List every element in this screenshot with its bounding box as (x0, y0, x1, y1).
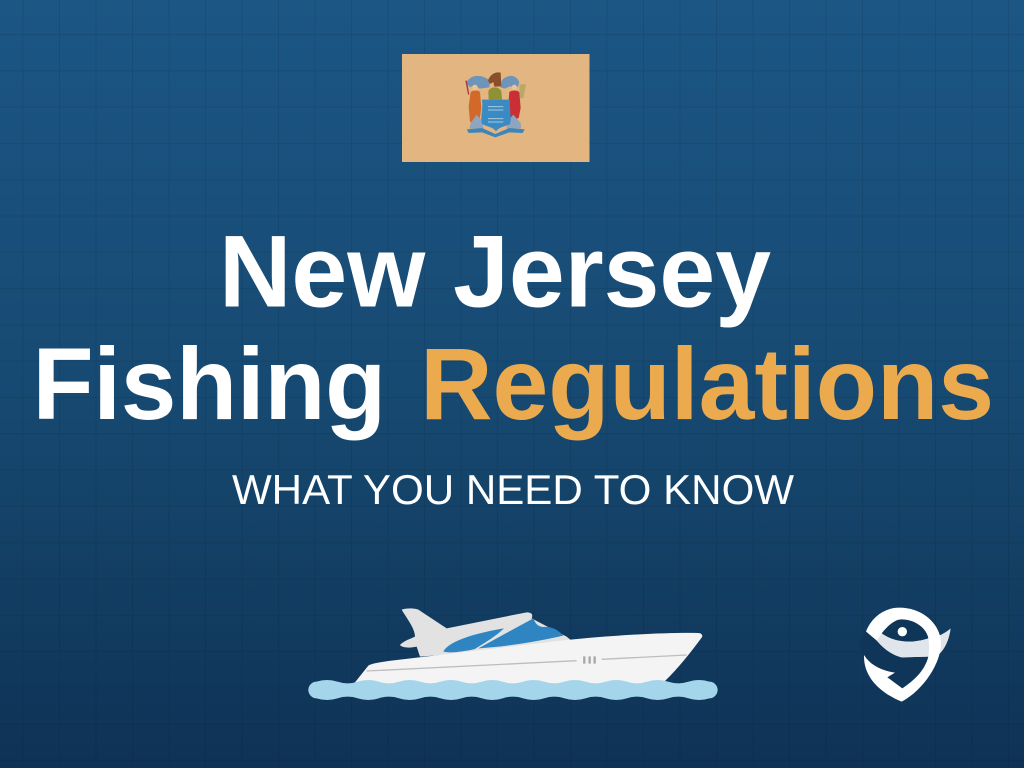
title line 2: Fishing: Fishing (32, 328, 386, 441)
seal ribbon (467, 128, 525, 137)
boat vents (584, 656, 595, 664)
logo eye lens (882, 619, 928, 642)
seal horse head (488, 72, 501, 87)
boat hull (355, 633, 702, 688)
logo tail (928, 628, 951, 657)
logo body (864, 608, 941, 702)
boat cabin and fin (400, 608, 577, 657)
seal shield (481, 100, 511, 131)
boat windows (443, 628, 504, 652)
seal cornucopia (519, 84, 526, 99)
logo inner lower dark (858, 632, 928, 688)
title line 2: Regulations: Regulations (420, 327, 994, 441)
flag seal (465, 72, 526, 137)
New Jersey state flag (402, 54, 590, 162)
logo band (877, 633, 929, 657)
logo eye (898, 627, 907, 636)
seal staff and cap (465, 81, 469, 95)
seal helmet (488, 87, 502, 100)
seal left figure (469, 90, 481, 122)
title line 1: New Jersey (219, 215, 771, 329)
icon: fish hook logo (858, 608, 951, 702)
boat stripe (367, 655, 687, 671)
icon: boat on water (308, 608, 718, 700)
seal rocks (469, 115, 521, 129)
seal right figure (508, 90, 521, 121)
water waves (308, 680, 718, 700)
seal right head (512, 85, 517, 90)
seal scrolls (467, 76, 519, 89)
seal left head (472, 85, 478, 90)
subtitle: WHAT YOU NEED TO KNOW (232, 466, 794, 513)
